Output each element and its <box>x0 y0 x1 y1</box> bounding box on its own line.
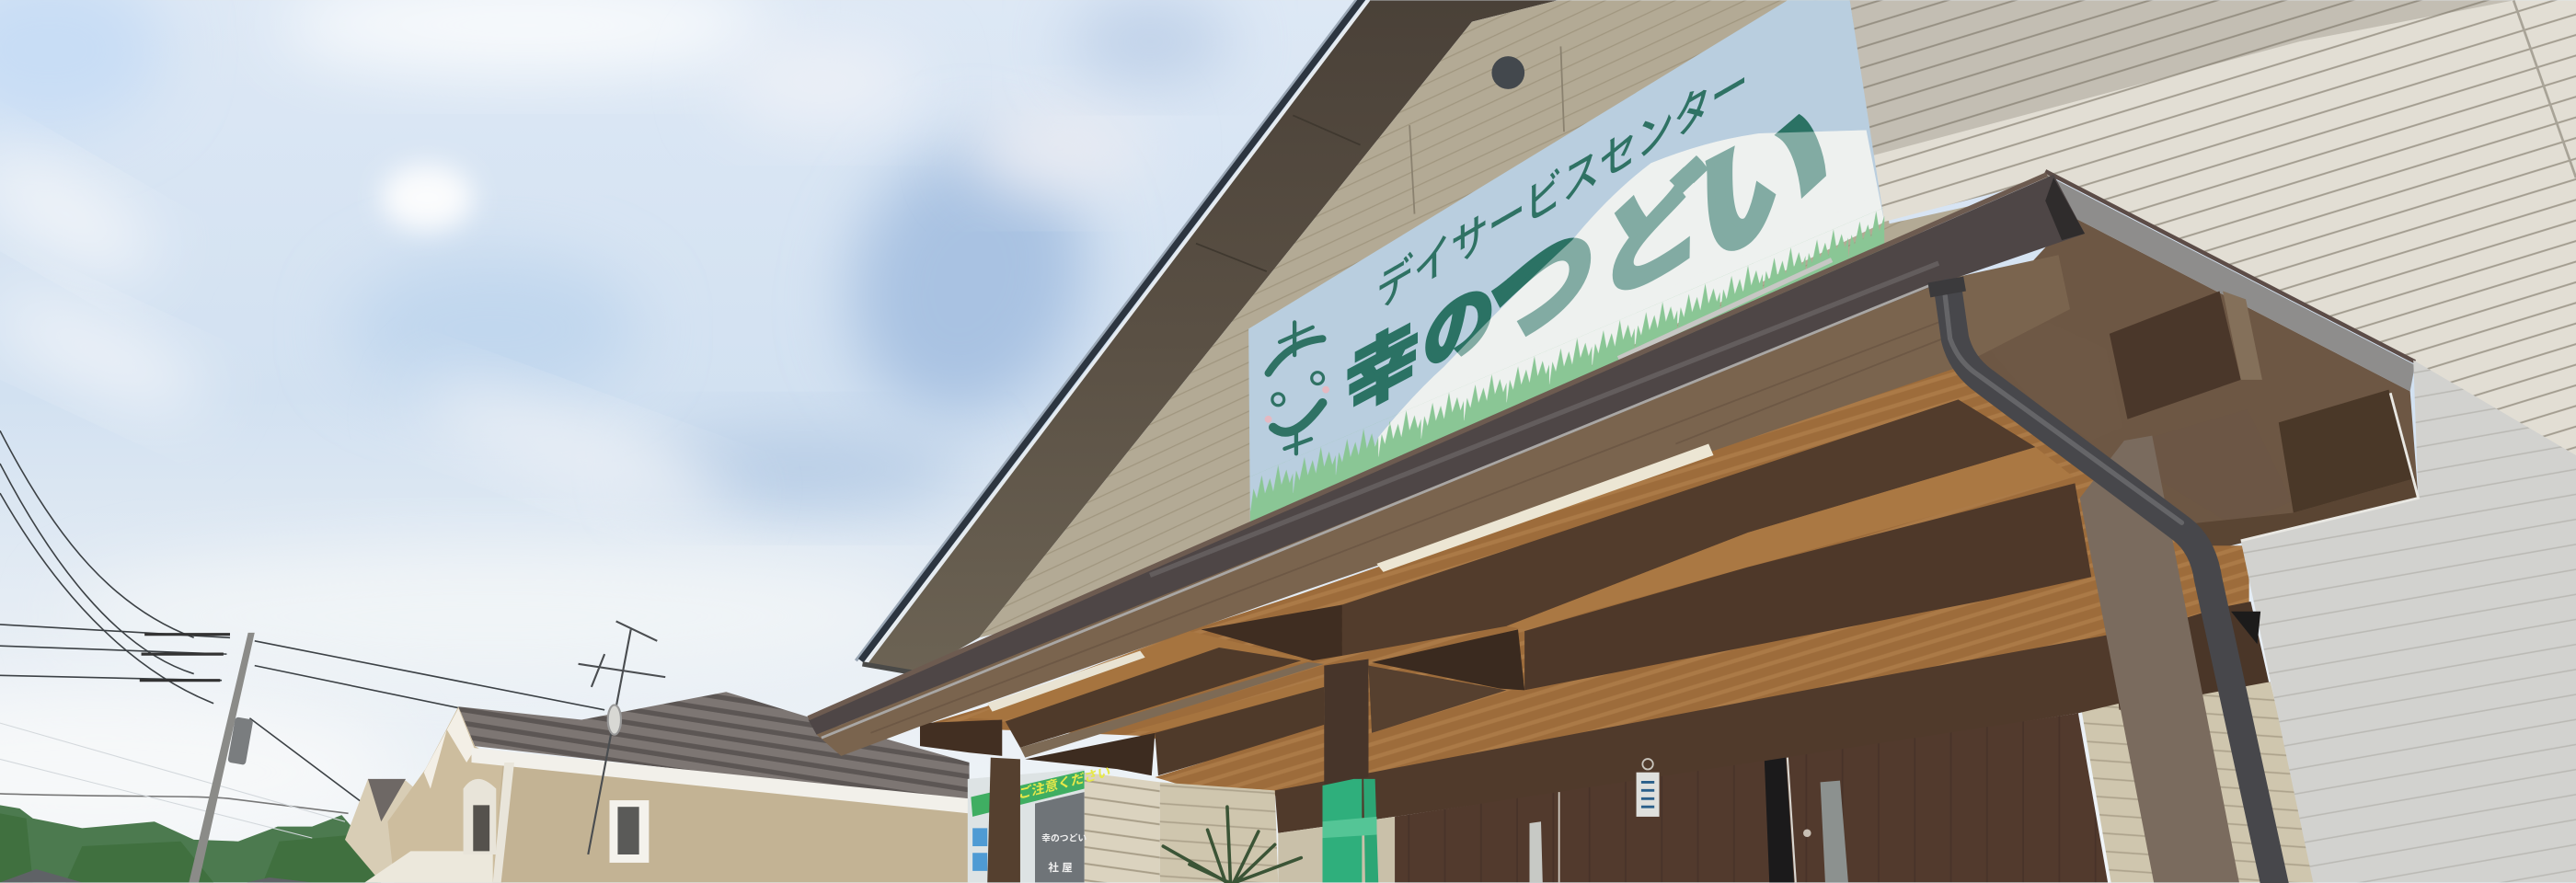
entrance notice sign <box>968 763 1110 882</box>
beam left upper <box>1006 648 1301 748</box>
timber block upper <box>2110 291 2241 419</box>
snow guard rail <box>1618 260 1832 359</box>
beam left light edge <box>1020 662 1324 758</box>
light fixture rear <box>987 651 1145 712</box>
centre post <box>1324 659 1369 786</box>
beam B <box>1524 483 2091 690</box>
cross block right <box>1372 629 1524 690</box>
trees on the hill <box>0 805 381 882</box>
wall trim around eave <box>2241 393 2419 541</box>
ceiling timber panels <box>920 365 2249 797</box>
entrance notice sign: 社 屋 <box>1048 861 1073 874</box>
sign title: の <box>1422 268 1495 387</box>
timber strip under eave <box>2168 478 2419 551</box>
dark wall behind post <box>2111 602 2269 710</box>
right wall sunlit siding <box>1850 0 2576 460</box>
orange panel centre left <box>1131 677 1324 731</box>
hanging tag <box>1637 759 1660 817</box>
sign title <box>1345 74 1830 430</box>
beam far left <box>920 720 1002 756</box>
downpipe collar <box>1927 277 1966 297</box>
downpipe <box>1945 292 2275 883</box>
gable wall <box>979 0 1972 637</box>
timber block middle <box>2145 409 2292 526</box>
roof edge metal <box>856 0 1369 674</box>
neighbouring house <box>345 692 970 882</box>
mascot logo <box>1265 322 1329 453</box>
entrance notice sign: ご注意ください <box>1018 763 1110 802</box>
sign title: つ <box>1490 201 1595 374</box>
sign title: 幸 <box>1345 309 1420 430</box>
timber block dark <box>2279 390 2415 513</box>
fascia timber <box>817 255 2070 756</box>
entrance notice sign: 幸のつどい <box>1041 832 1087 844</box>
timber block end grain <box>2223 291 2262 380</box>
sun wash over lettering <box>1378 130 1878 437</box>
distant rooftops <box>0 869 312 882</box>
header beam <box>1275 635 2120 833</box>
timber beam end <box>1984 322 2122 441</box>
potted plant <box>1163 807 1301 882</box>
orange panel left <box>968 631 1313 720</box>
wall shade band <box>1850 0 2513 156</box>
orange strip <box>1507 447 2074 629</box>
sign subtitle: デイサービスセンター <box>1376 56 1748 319</box>
main roof soffit <box>866 0 1558 674</box>
tv antenna <box>579 621 665 854</box>
utility pole <box>140 633 255 882</box>
power lines <box>0 430 604 838</box>
sign board <box>1248 0 1884 577</box>
beam left lower <box>1155 687 1324 775</box>
left post <box>987 758 1020 882</box>
big front post <box>2080 436 2239 882</box>
right wall shaded siding <box>2241 360 2576 882</box>
sun patch on sign <box>1363 130 1884 476</box>
sign title: い <box>1696 74 1830 296</box>
cross block <box>1201 605 1342 660</box>
canopy roof edge <box>2045 171 2415 361</box>
entrance wall <box>1085 773 1278 882</box>
orange panel 3 <box>1155 579 2101 790</box>
eaves gutter <box>809 175 2085 738</box>
corner trim <box>2513 0 2576 178</box>
sign title: ど <box>1600 148 1706 322</box>
light fixture front <box>1376 444 1713 572</box>
beam centre left <box>1025 733 1155 775</box>
bird silhouette <box>2231 612 2260 644</box>
wall behind right post <box>2081 682 2317 882</box>
beam A <box>1342 399 2035 656</box>
canopy gable fascia <box>2045 175 2415 391</box>
fascia grain <box>870 322 1947 733</box>
grass band <box>1250 208 1884 577</box>
wall beside door <box>1278 817 1395 882</box>
beam right of post <box>1369 666 1507 733</box>
doors <box>1395 713 2108 882</box>
green post guard <box>1323 779 1378 882</box>
canopy underside gable <box>1955 217 2419 545</box>
wall vent <box>1491 56 1524 89</box>
